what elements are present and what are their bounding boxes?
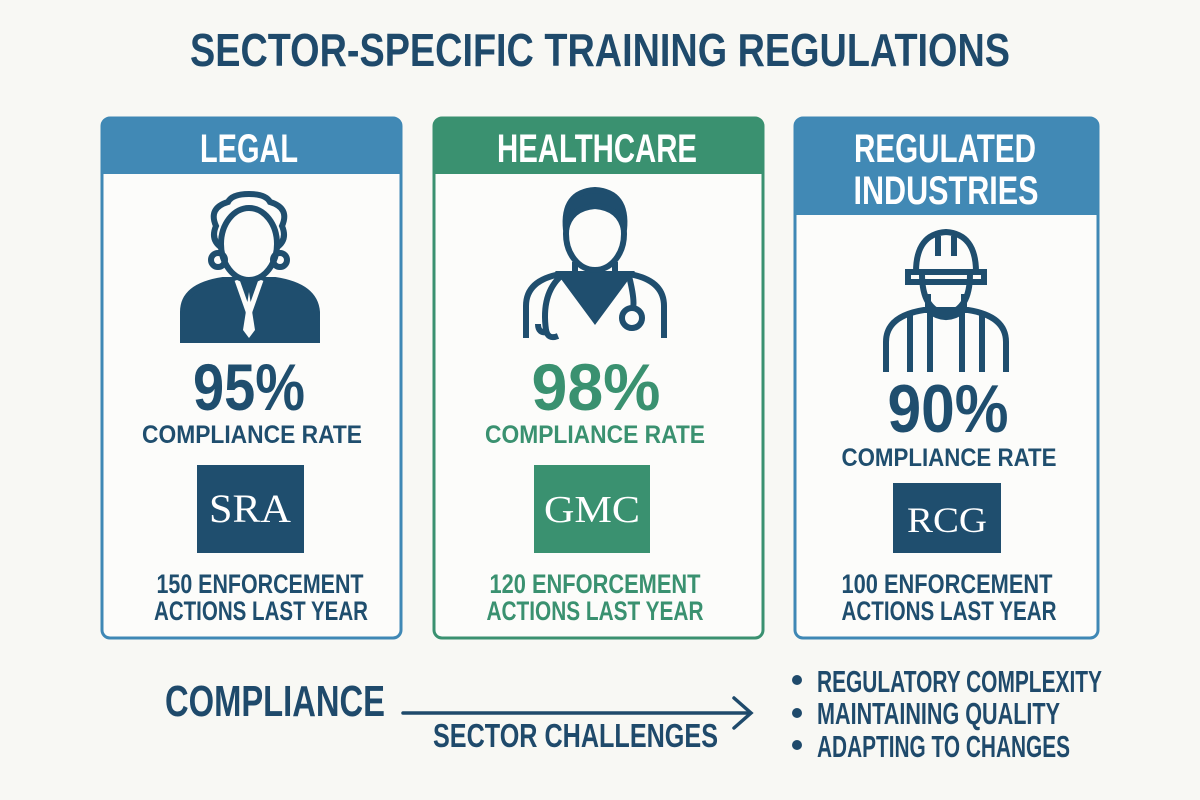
logo: GMC: GMC	[544, 489, 640, 531]
text: enforcement: 100 ENFORCEMENT	[842, 569, 1053, 599]
heading: legal: LEGAL	[200, 127, 298, 171]
logo: RCG	[893, 483, 1001, 553]
heading: healthcare: HEALTHCARE	[497, 127, 697, 171]
panel: legal: ACTIONS LAST YEAR	[154, 596, 368, 626]
icon: doctor	[526, 190, 664, 338]
panel: legal: COMPLIANCE RATE	[142, 421, 362, 449]
icon: lawyer	[183, 194, 317, 340]
text: enforcement: 150 ENFORCEMENT	[156, 569, 364, 599]
panel: regulated industries	[795, 118, 1098, 638]
list: challenges: ADAPTING TO CHANGES	[817, 729, 1070, 764]
logo: SRA: SRA	[209, 486, 291, 531]
logo: RCG: RCG	[907, 500, 987, 540]
panel: regulated industries: ACTIONS LAST YEAR	[842, 596, 1056, 626]
arrow	[403, 698, 751, 728]
text: enforcement: 120 ENFORCEMENT	[490, 569, 701, 599]
logo: SRA	[197, 465, 304, 553]
icon: worker	[886, 232, 1006, 372]
label: compliance: COMPLIANCE	[165, 677, 385, 726]
panel: legal	[102, 118, 401, 638]
stat: 90%: 90%	[888, 371, 1008, 447]
heading: regulated industries: REGULATED	[854, 127, 1036, 171]
panel: healthcare	[434, 118, 763, 638]
list: challenges	[792, 664, 1102, 764]
panel: healthcare: ACTIONS LAST YEAR	[486, 596, 704, 626]
panel: regulated industries: INDUSTRIES	[854, 169, 1038, 213]
stat: 95%: 95%	[193, 350, 305, 424]
list: challenges: MAINTAINING QUALITY	[817, 696, 1060, 731]
panel: regulated industries: COMPLIANCE RATE	[842, 444, 1056, 472]
stat: 98%: 98%	[532, 350, 660, 424]
title: SECTOR-SPECIFIC TRAINING REGULATIONS	[190, 24, 1010, 76]
panel: healthcare: COMPLIANCE RATE	[485, 421, 705, 449]
label: sector challenges: SECTOR CHALLENGES	[433, 717, 718, 754]
logo: GMC	[534, 465, 650, 553]
